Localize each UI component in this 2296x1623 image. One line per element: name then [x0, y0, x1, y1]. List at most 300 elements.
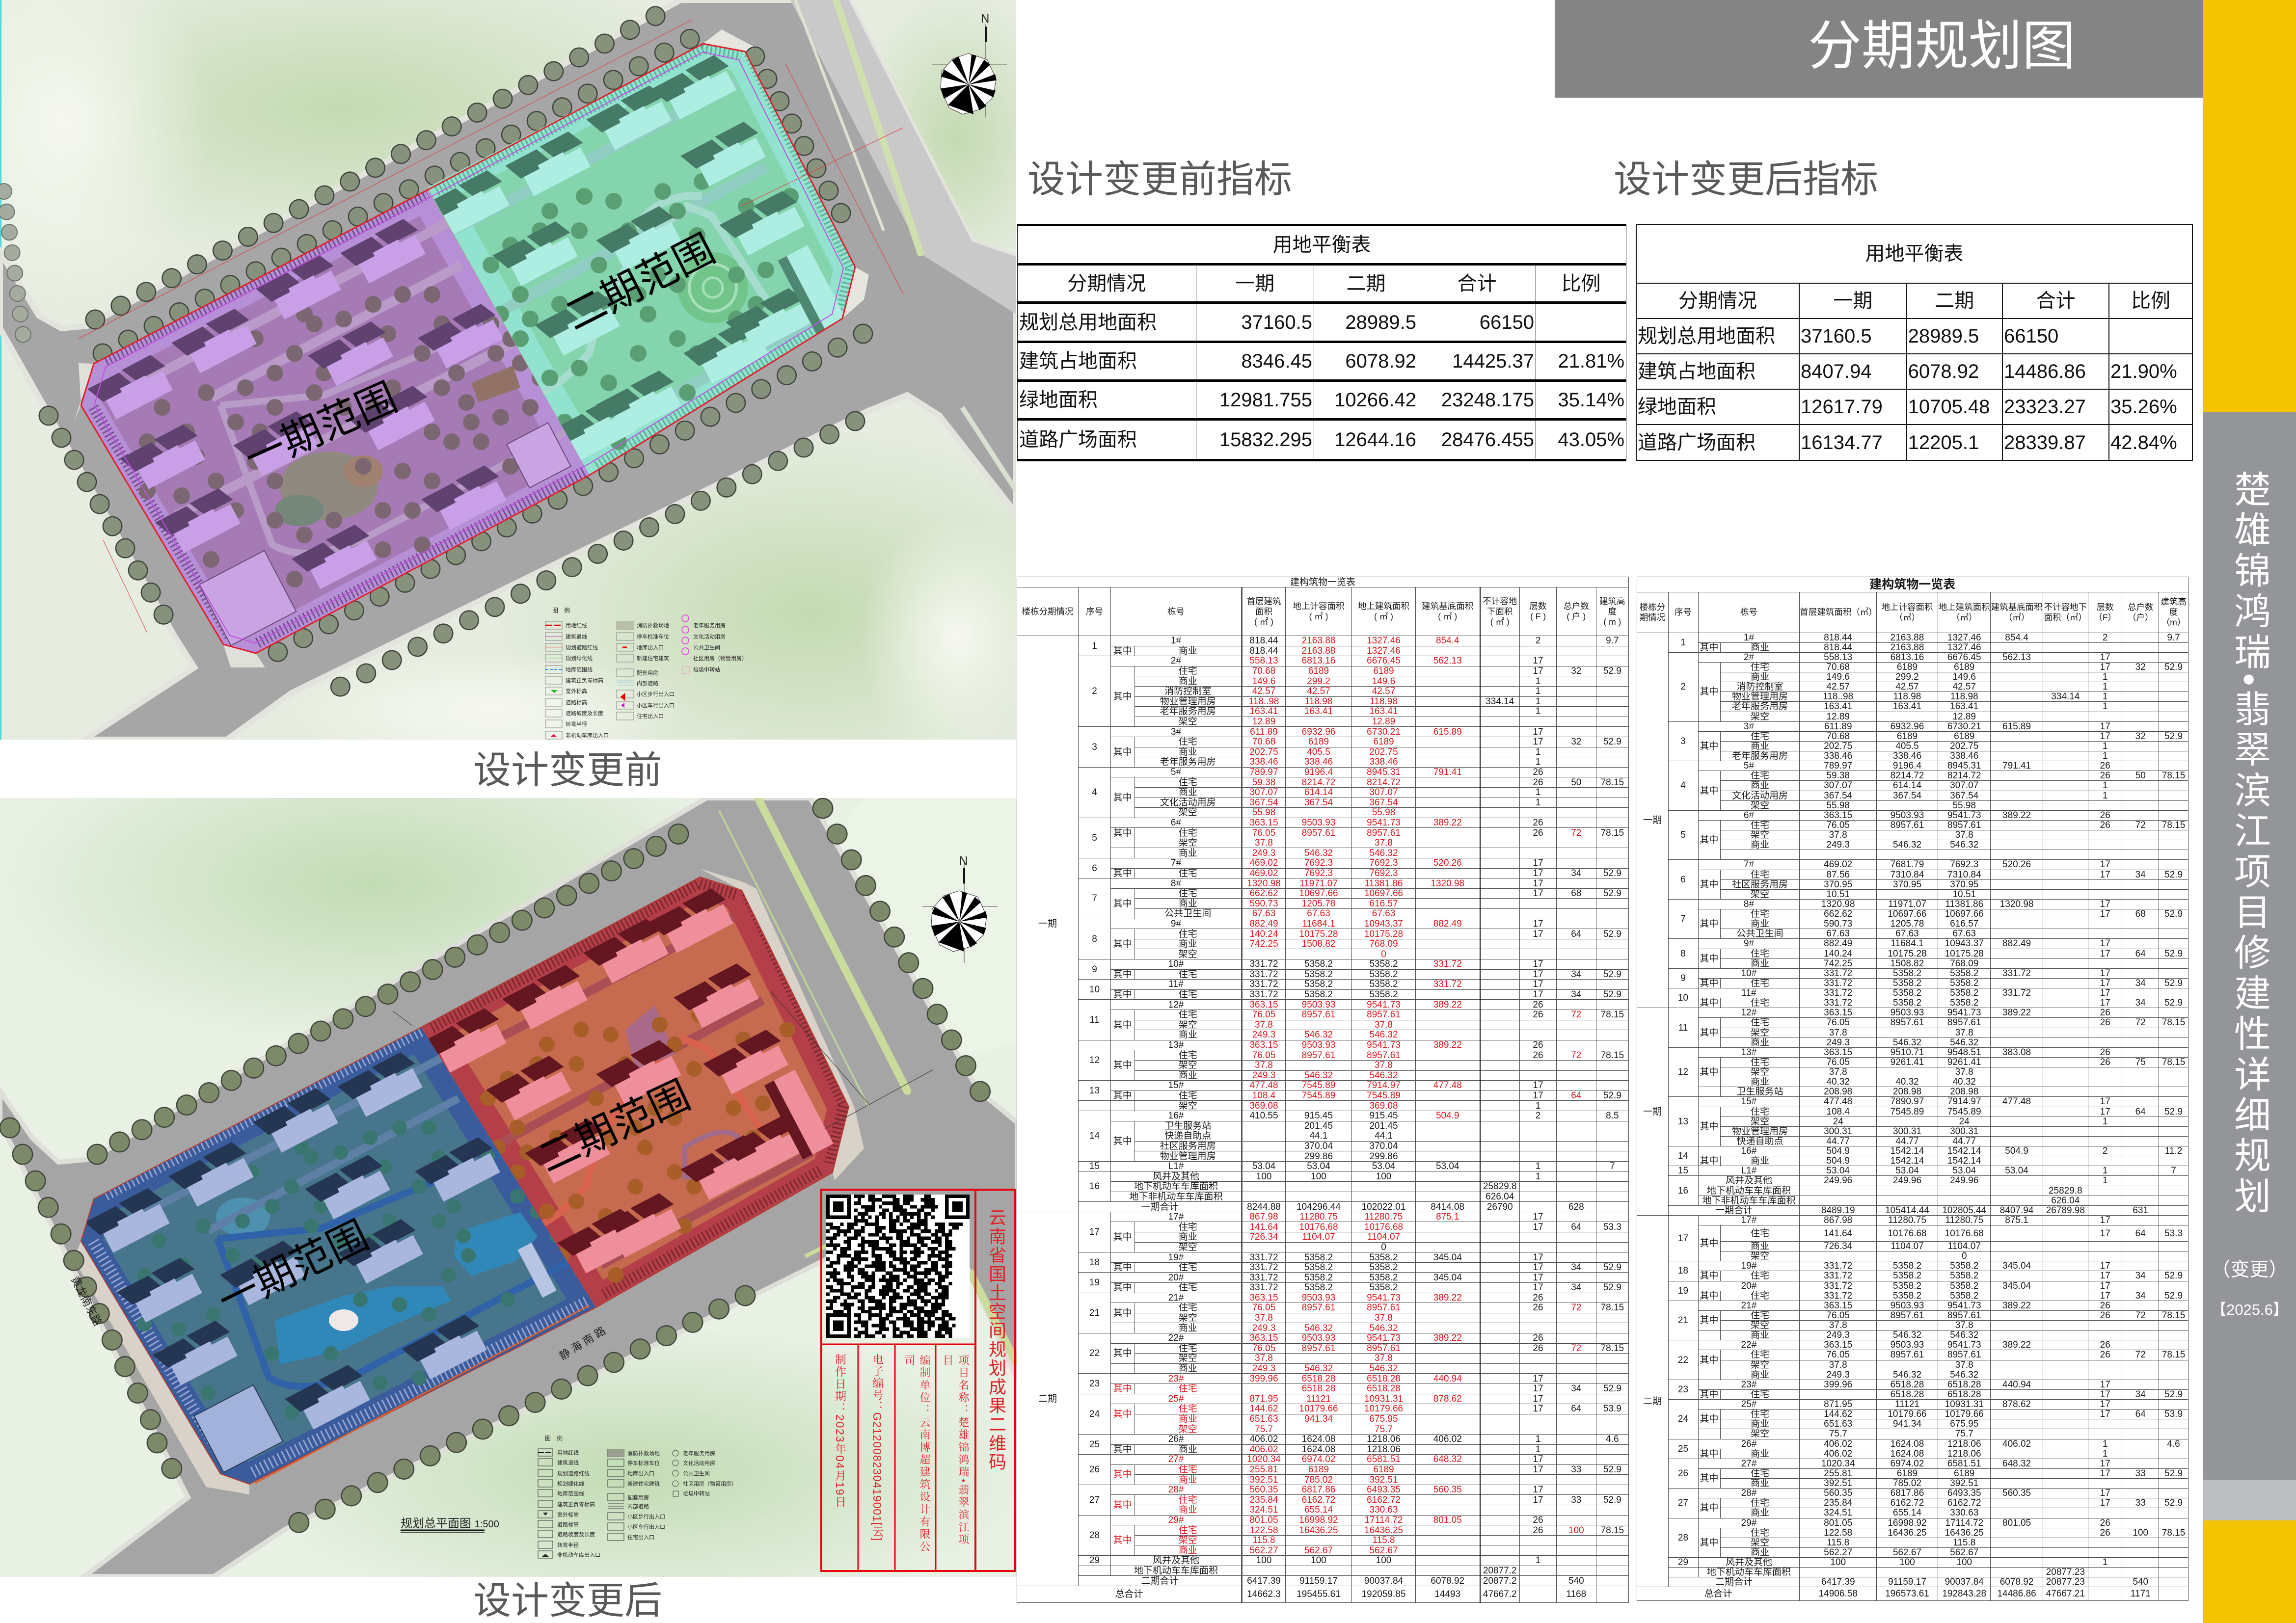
table: building list before change: 8957.61	[1367, 1343, 1401, 1354]
table: building list before change: 10	[1089, 984, 1100, 995]
table: building list before change: 882.49	[1433, 919, 1462, 929]
table: building list before change: 100	[1311, 1556, 1326, 1566]
table: building list before change: 25	[1089, 1439, 1100, 1450]
table: land balance after change: 14486.86	[2004, 361, 2086, 382]
table: building list before change: 1	[1536, 1161, 1540, 1171]
table: building list before change: 29#	[1168, 1515, 1184, 1525]
table: building list before change: 下面积	[1487, 607, 1513, 616]
table: building list before change: 住宅	[1179, 1010, 1197, 1020]
table: building list before change: 64	[1571, 1222, 1581, 1232]
table: land balance after change: 绿地面积	[1638, 396, 1716, 418]
table: building list before change: 768.09	[1369, 939, 1398, 949]
table: building list before change: 6162.72	[1367, 1495, 1401, 1505]
table: building list before change: 8#	[1171, 878, 1181, 888]
table: land balance before change: 37160.5	[1241, 311, 1312, 333]
table: building list before change: 78.15	[1601, 777, 1624, 787]
table: building list before change: 7692.3	[1369, 858, 1398, 868]
table: building list before change: 615.89	[1433, 727, 1462, 737]
table: building list before change: 2	[1536, 636, 1540, 646]
roads	[0, 0, 1016, 740]
table: building list before change: 公共卫生间	[1164, 909, 1211, 919]
table: building list before change: 338.46	[1304, 757, 1333, 767]
table: building list before change: 52.9	[1603, 1384, 1621, 1394]
table: building list after change: 2	[1680, 682, 1686, 692]
table: building list before change: 住宅	[1179, 1262, 1197, 1273]
table: building list before change: 商业	[1179, 1414, 1197, 1424]
table: building list before change: 389.22	[1433, 1040, 1462, 1050]
table: building list before change: 32	[1571, 666, 1581, 676]
table: building list before change: 42.57	[1252, 686, 1275, 696]
table: building list before change: 648.32	[1433, 1455, 1462, 1464]
table: building list before change: 100	[1256, 1556, 1271, 1566]
table: land balance before change: 合计	[1457, 273, 1496, 294]
table: building list before change: 10931.31	[1364, 1394, 1403, 1404]
table: building list before change: 363.15	[1249, 1293, 1278, 1303]
table: building list before change: 商业	[1179, 1363, 1197, 1374]
table: building list before change: 7692.3	[1369, 868, 1398, 878]
table: building list before change: 546.32	[1304, 1070, 1333, 1081]
table: building list after change: 14486.86	[1997, 1589, 2036, 1599]
table: building list before change: 149.6	[1372, 676, 1395, 686]
table: building list before change: 25829.8	[1483, 1182, 1517, 1192]
table: building list before change: 7#	[1171, 858, 1181, 868]
legend: before change: 地库范围线	[566, 666, 593, 673]
table: building list before change: 13	[1089, 1086, 1100, 1096]
table: building list before change: 4.6	[1606, 1434, 1619, 1444]
table: building list before change: 17#	[1168, 1212, 1184, 1222]
table: land balance after change: 10705.48	[1908, 396, 1990, 418]
table: building list before change: 1320.98	[1247, 878, 1281, 888]
table: building list before change: 37.8	[1255, 1313, 1273, 1323]
table: building list before change: 17	[1533, 1222, 1543, 1232]
table: building list before change: 17114.72	[1365, 1515, 1403, 1525]
table: building list after change: 其中	[1700, 741, 1719, 751]
table: building list before change: 249.3	[1252, 1030, 1275, 1040]
table: building list before change: 52.9	[1603, 1464, 1621, 1475]
table: building list before change: ( 户 )	[1567, 612, 1586, 621]
table: building list before change: 16#	[1168, 1111, 1184, 1121]
legend: after change: 图 例	[545, 1435, 563, 1442]
table: building list before change: 其中	[1113, 1535, 1132, 1545]
table: building list before change: 28	[1089, 1530, 1100, 1541]
table: building list before change: 5358.2	[1304, 969, 1333, 980]
table: building list before change: 楼栋分期情况	[1022, 607, 1073, 616]
table: building list before change: 架空	[1179, 1020, 1197, 1030]
table: building list before change: 52.9	[1603, 929, 1621, 939]
legend: before change: 道路坡度及长度	[566, 710, 603, 717]
table: building list before change: 9#	[1171, 919, 1181, 929]
table: building list before change: 406.02	[1249, 1434, 1278, 1444]
table: building list before change: 34	[1571, 989, 1581, 1000]
table: building list before change: 6189	[1308, 666, 1329, 676]
table: building list before change: 架空	[1179, 1424, 1197, 1434]
table: building list before change: 物业管理用房	[1160, 1151, 1216, 1161]
table: building list before change: 144.62	[1249, 1404, 1278, 1414]
table: building list before change: 201.45	[1369, 1121, 1398, 1131]
legend: after change: 转弯半径	[557, 1542, 579, 1548]
table: building list before change: 其中	[1113, 1232, 1132, 1242]
table: building list before change: 28#	[1168, 1485, 1184, 1495]
table: building list before change: 8957.61	[1367, 1050, 1401, 1060]
table: building list before change: 0	[1381, 949, 1386, 959]
table: building list before change: 562.13	[1433, 656, 1462, 666]
table: building list before change: 其中	[1113, 1348, 1132, 1358]
table: building list after change: 期情况	[1640, 612, 1665, 622]
table: land balance after change: 21.90%	[2110, 361, 2177, 382]
table: building list before change: 其中	[1113, 1262, 1132, 1273]
plan: before design change	[0, 0, 1016, 740]
table: building list before change: 406.02	[1433, 1434, 1462, 1444]
table: building list before change: 住宅	[1179, 929, 1197, 939]
table: building list before change: 其中	[1113, 692, 1132, 702]
legend: before change: 规划绿化线	[566, 655, 593, 662]
table: building list before change: 47667.2	[1483, 1589, 1517, 1599]
QR code	[826, 1195, 970, 1338]
table: building list after change: 22	[1678, 1355, 1688, 1365]
table: building list before change: 53.04	[1436, 1161, 1459, 1171]
table: building list before change: 560.35	[1433, 1485, 1462, 1495]
table: building list before change: 202.75	[1369, 747, 1398, 757]
table: building list after change: （㎡）	[1951, 612, 1977, 622]
table: building list before change: 52.9	[1603, 888, 1621, 899]
table: building list before change: 614.14	[1304, 787, 1333, 798]
table: building list before change: 1327.46	[1367, 646, 1401, 656]
table: building list before change: 410.55	[1249, 1111, 1278, 1121]
legend: after change: 室外标高	[557, 1511, 579, 1518]
table: building list before change: 9503.93	[1302, 1000, 1335, 1010]
table: building list before change: 21#	[1168, 1293, 1184, 1303]
zone: phase one (blue)	[81, 1028, 596, 1484]
table: building list before change: 卫生服务站	[1164, 1121, 1211, 1131]
table: building list after change: 一期	[1643, 815, 1662, 825]
legend: before change: 建筑退线	[566, 633, 587, 640]
legend: before change: 道路标高	[566, 699, 587, 706]
table: building list before change: 17	[1533, 959, 1543, 969]
table: building list before change: 801.05	[1433, 1515, 1462, 1525]
legend: after change: 建筑退线	[557, 1459, 579, 1466]
table: land balance after change: 用地平衡表	[1865, 243, 1964, 265]
table: building list before change: 商业	[1179, 787, 1197, 798]
table: building list before change: 26	[1533, 1515, 1543, 1525]
legend: after change: 道路标高	[557, 1521, 579, 1528]
table: land balance before change: 一期	[1235, 273, 1274, 294]
table: building list after change: 楼栋分	[1640, 602, 1665, 612]
table: building list before change: 其中	[1113, 646, 1132, 656]
table: building list before change: 90037.84	[1364, 1576, 1403, 1586]
table: building list after change: 总户数	[2128, 602, 2153, 612]
table: building list before change: 67.63	[1252, 909, 1275, 919]
table: building list before change: 558.13	[1249, 656, 1278, 666]
table: building list before change: 37.8	[1255, 1060, 1273, 1070]
table: building list before change: 675.95	[1369, 1414, 1398, 1424]
table: building list after change: 141.64	[1824, 1228, 1852, 1239]
table: building list before change: 商业	[1179, 1323, 1197, 1333]
table: building list before change: 27#	[1168, 1455, 1184, 1464]
table: building list before change: 11280.75	[1299, 1212, 1338, 1222]
table: building list before change: 791.41	[1433, 767, 1462, 777]
table: building list before change: 392.51	[1249, 1475, 1278, 1485]
table: building list before change: 655.14	[1304, 1505, 1333, 1515]
table: building list before change: 其中	[1113, 989, 1132, 1000]
table: building list before change: 5358.2	[1369, 1262, 1398, 1273]
table: building list before change: 住宅	[1179, 828, 1197, 838]
table: building list before change: 100	[1311, 1171, 1326, 1182]
table: land balance before change: 66150	[1480, 311, 1534, 333]
table: building list after change: 13	[1678, 1117, 1688, 1127]
table: building list before change: 17	[1533, 1404, 1543, 1414]
table: building list before change: 64	[1571, 1091, 1581, 1101]
table: building list before change: 255.81	[1249, 1464, 1278, 1475]
table: building list before change: 72	[1571, 828, 1581, 838]
table: building list before change: 9503.93	[1302, 1293, 1335, 1303]
table: building list before change: 854.4	[1436, 636, 1459, 646]
table: building list before change: 91159.17	[1299, 1576, 1338, 1586]
table: building list before change: 345.04	[1433, 1252, 1462, 1262]
table: building list before change: 32	[1571, 737, 1581, 747]
table: building list before change: 37.8	[1255, 1020, 1273, 1030]
zone: phase two (red)	[421, 878, 848, 1307]
table: building list after change: 其中	[1700, 1538, 1719, 1548]
table: building list after change	[1637, 577, 2188, 1601]
table: building list before change: 6078.92	[1431, 1576, 1464, 1586]
table: building list before change: 地上建筑面积	[1358, 601, 1409, 611]
table: building list before change: 17	[1533, 1374, 1543, 1384]
legend: after change: 地库范围线	[557, 1490, 584, 1497]
table: building list before change: 367.54	[1369, 798, 1398, 808]
table: building list before change: 商业	[1179, 1232, 1197, 1242]
table: building list before change: 6493.35	[1367, 1485, 1401, 1495]
table: building list after change: 5	[1680, 830, 1686, 840]
table: building list before change: 6813.16	[1302, 656, 1335, 666]
table: building list before change: 1104.07	[1367, 1232, 1400, 1242]
street names: 黄龙南东路	[69, 1274, 104, 1328]
table: building list after change: 一期	[1643, 1107, 1662, 1117]
table: land balance after change: 二期	[1935, 290, 1974, 312]
table: building list before change: 363.15	[1249, 1333, 1278, 1343]
table: building list before change: 架空	[1179, 838, 1197, 848]
table: building list before change: 72	[1571, 1050, 1581, 1060]
table: building list after change: 其中	[1700, 879, 1719, 890]
table: land balance after change: 6078.92	[1908, 361, 1979, 382]
table: building list before change: 3#	[1171, 727, 1181, 737]
vertical project title: 楚雄锦鸿瑞•翡翠滨江项目修建性详细规划	[2229, 470, 2270, 1218]
table: building list before change: 140.24	[1249, 929, 1278, 939]
table: building list before change: 8945.31	[1367, 767, 1401, 777]
table: building list before change: 其中	[1113, 1308, 1132, 1318]
legend: after change: 住宅出入口	[627, 1534, 654, 1541]
table: building list before change: 26	[1533, 828, 1543, 838]
legend: after change: 文化活动用房	[683, 1460, 715, 1466]
table: building list before change: 785.02	[1304, 1475, 1333, 1485]
table: building list before change: 163.41	[1304, 707, 1333, 717]
table: building list before change: 370.04	[1369, 1141, 1398, 1151]
site boundary	[81, 877, 933, 1484]
table: building list before change: 1	[1536, 707, 1540, 717]
table: building list before change: 100	[1568, 1525, 1584, 1535]
street trees	[10, 808, 982, 1531]
table: building list before change: 住宅	[1179, 777, 1197, 787]
table: building list before change: 34	[1571, 969, 1581, 980]
table: building list before change: 地上计容面积	[1293, 601, 1344, 611]
table: building list before change: 34	[1571, 1262, 1581, 1273]
table: building list before change: 5358.2	[1369, 1283, 1398, 1293]
table: building list before change: 37.8	[1375, 1060, 1393, 1070]
table: building list before change: 546.32	[1304, 1323, 1333, 1333]
table: building list before change: 层数	[1530, 601, 1546, 611]
table: building list before change: 100	[1376, 1171, 1391, 1182]
table: building list before change: 331.72	[1249, 989, 1278, 1000]
table: building list before change: 其中	[1113, 1020, 1132, 1030]
table: building list before change: 726.34	[1249, 1232, 1278, 1242]
revision date: 【2025.6】	[2211, 1301, 2288, 1318]
table: building list before change: 100	[1256, 1171, 1271, 1182]
table: building list before change: 818.44	[1249, 646, 1278, 656]
table: building list before change: 55.98	[1372, 808, 1395, 818]
heading: indicators after change: 设计变更后指标	[1614, 159, 1878, 201]
table: building list before change: 5	[1092, 833, 1097, 843]
table: building list before change: 序号	[1086, 607, 1103, 616]
table: building list after change: 序号	[1675, 607, 1692, 617]
table: building list before change: 34	[1571, 868, 1581, 878]
table: building list before change: 331.72	[1249, 980, 1278, 989]
table: building list before change: 23#	[1168, 1374, 1184, 1384]
table: building list after change: 其中	[1700, 919, 1719, 929]
legend: after change: 非机动车库出入口	[557, 1551, 600, 1558]
table: building list before change: 64	[1571, 1404, 1581, 1414]
table: building list before change: 651.63	[1249, 1414, 1278, 1424]
table: building list before change: 70.68	[1252, 737, 1275, 747]
table: building list before change: 8957.61	[1367, 1010, 1401, 1020]
table: building list before change: 55.98	[1252, 808, 1275, 818]
table: building list before change: 地下非机动车车库面积	[1129, 1192, 1222, 1202]
table: building list before change: 架空	[1179, 949, 1197, 959]
table: building list before change: 1104.07	[1302, 1232, 1335, 1242]
table: building list before change: 662.62	[1249, 888, 1278, 899]
table: building list before change: 307.07	[1369, 787, 1398, 798]
table: building list before change: 26	[1533, 1525, 1543, 1535]
table: building list before change: 面积	[1255, 607, 1272, 616]
table: building list before change: 76.05	[1252, 1343, 1275, 1354]
table: building list before change: 13#	[1168, 1040, 1184, 1050]
table: building list before change: 6518.28	[1302, 1374, 1335, 1384]
table: building list before change: 架空	[1179, 1101, 1197, 1111]
table: building list after change: 地上计容面积	[1881, 602, 1933, 612]
legend: after change: 社区用房（物管用房）	[683, 1480, 737, 1487]
table: building list before change: 1	[1536, 787, 1540, 798]
table: building list before change: 1	[1536, 686, 1540, 696]
table: land balance before change: 8346.45	[1241, 350, 1312, 372]
table: building list before change: 389.22	[1433, 1333, 1462, 1343]
table: building list before change: 882.49	[1249, 919, 1278, 929]
icon: compass	[922, 854, 998, 963]
table: building list after change: 首层建筑面积（㎡）	[1800, 607, 1876, 617]
table: building list before change: 20877.2	[1483, 1566, 1517, 1576]
table: building list before change: 9196.4	[1304, 767, 1333, 777]
table: building list before change: 37.8	[1255, 838, 1273, 848]
table: building list before change: 8414.08	[1431, 1202, 1464, 1212]
table: building list before change: 5358.2	[1304, 989, 1333, 1000]
table: building list before change: 24	[1089, 1409, 1100, 1419]
table: building list before change: 一期	[1038, 919, 1057, 929]
table: land balance after change: 规划总用地面积	[1638, 325, 1775, 347]
table: building list before change: 其中	[1113, 1384, 1132, 1394]
table: building list before change: 10176.68	[1364, 1222, 1403, 1232]
production date: 制作日期：2023年04月19日	[834, 1354, 846, 1508]
table: building list after change: 其中	[1700, 1238, 1719, 1249]
legend: before change: 非机动车库出入口	[566, 732, 609, 739]
table: building list before change: 37.8	[1375, 1313, 1393, 1323]
table: building list before change: 7545.89	[1367, 1091, 1401, 1101]
table: land balance before change: 绿地面积	[1019, 389, 1098, 411]
table: building list before change: 102022.01	[1362, 1202, 1405, 1212]
table: building list before change: 5358.2	[1369, 1252, 1398, 1262]
table: building list before change: 818.44	[1249, 636, 1278, 646]
table: building list before change: 其中	[1113, 1091, 1132, 1101]
table: building list before change: 19	[1089, 1277, 1100, 1288]
table: building list before change: 1#	[1171, 636, 1181, 646]
table: building list before change: 8957.61	[1302, 1050, 1335, 1060]
table: building list before change: 文化活动用房	[1160, 798, 1216, 808]
table: building list before change: 7	[1610, 1161, 1615, 1171]
project name: 项目名称：楚雄锦鸿瑞•翡翠滨江项	[957, 1355, 970, 1546]
table: building list before change: ( ㎡ )	[1309, 612, 1328, 621]
table: building list before change: 1	[1536, 676, 1540, 686]
roads	[0, 798, 1017, 1576]
table: building list before change: 栋号	[1167, 607, 1185, 616]
table: building list before change: 562.67	[1369, 1545, 1398, 1556]
table: building list before change: 商业	[1179, 747, 1197, 757]
table: building list before change: 29	[1089, 1556, 1100, 1566]
table: building list before change: 26	[1533, 1010, 1543, 1020]
table: building list before change: 度	[1608, 607, 1617, 616]
table: building list before change: 16	[1089, 1181, 1100, 1192]
table: building list before change: 44.1	[1310, 1131, 1327, 1141]
table: building list before change: 118.98	[1305, 696, 1332, 707]
table: building list before change: 26	[1533, 1000, 1543, 1010]
table: building list before change: 540	[1568, 1576, 1584, 1586]
table: building list before change: 住宅	[1179, 1495, 1197, 1505]
table: building list before change: 其中	[1113, 1283, 1132, 1293]
table: building list before change: 11280.75	[1365, 1212, 1403, 1222]
table: building list after change: 其中	[1700, 1355, 1719, 1365]
plan: after design change	[0, 798, 1017, 1577]
table: building list before change: 8957.61	[1367, 1303, 1401, 1313]
table: building list before change: 249.3	[1252, 1070, 1275, 1081]
table: building list before change: 42.57	[1372, 686, 1395, 696]
table: land balance after change: 16134.77	[1801, 432, 1883, 453]
table: building list before change: 17	[1533, 1495, 1543, 1505]
table: building list before change: 307.07	[1249, 787, 1278, 798]
table: building list before change: 老年服务用房	[1160, 707, 1216, 717]
table: building list after change: 16	[1678, 1186, 1688, 1196]
table: building list before change: 299.86	[1304, 1151, 1333, 1161]
legend: after change: 内部道路	[627, 1503, 649, 1510]
table: building list before change: 34	[1571, 1384, 1581, 1394]
table: building list before change: 338.46	[1249, 757, 1278, 767]
table: building list before change: 8214.72	[1367, 777, 1401, 787]
table: building list before change: 17	[1533, 1283, 1543, 1293]
table: building list before change: 149.6	[1252, 676, 1275, 686]
table: land balance after change: 分期情况	[1678, 290, 1757, 312]
table: building list before change: 17	[1533, 1081, 1543, 1091]
table: building list before change: 1	[1536, 1171, 1540, 1182]
table: building list before change: 367.54	[1249, 798, 1278, 808]
table: building list before change: 12	[1089, 1055, 1100, 1065]
table: building list before change: 26	[1533, 1303, 1543, 1313]
table: building list before change: 72	[1571, 1010, 1581, 1020]
table: building list before change: 建构筑物一览表	[1290, 577, 1355, 587]
table: building list before change: 8244.88	[1247, 1202, 1281, 1212]
